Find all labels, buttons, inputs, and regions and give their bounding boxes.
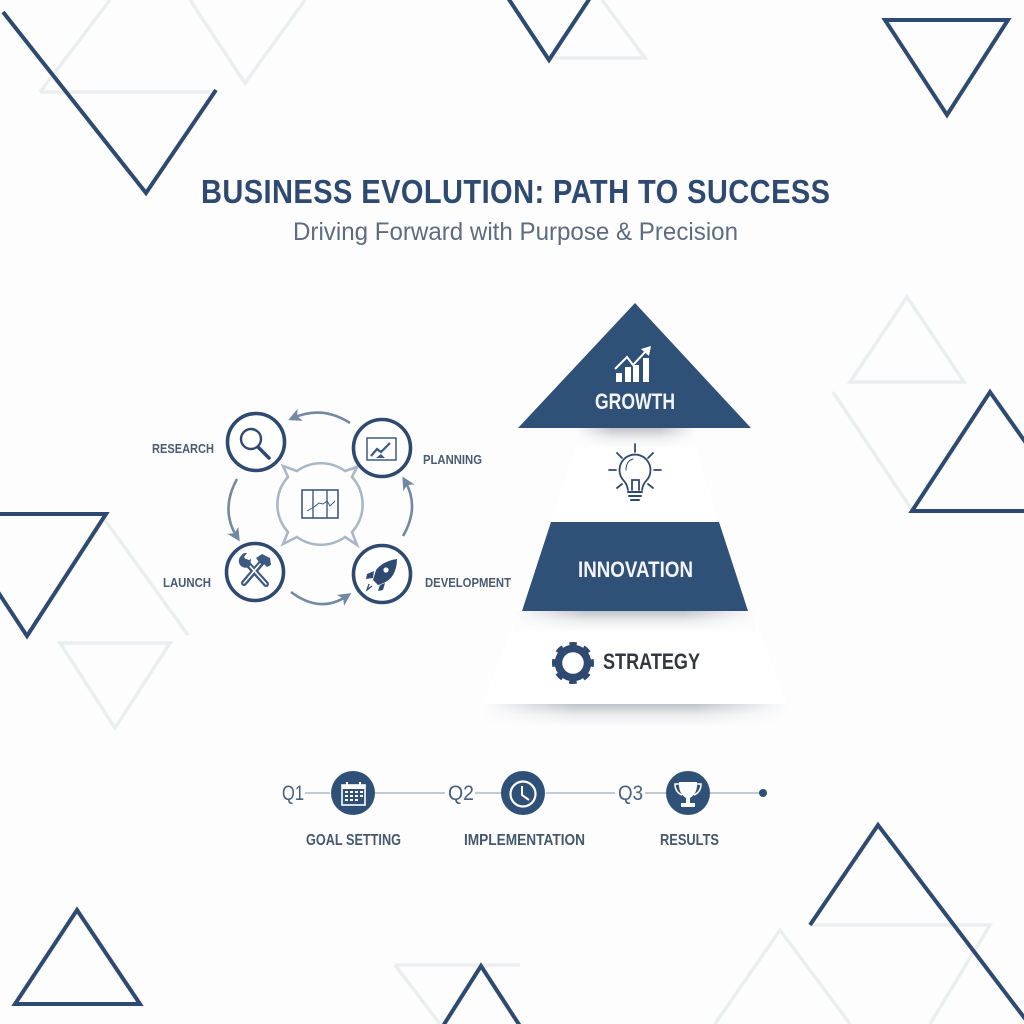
label: Q1: Q1 bbox=[282, 782, 304, 805]
icon: gear bbox=[554, 644, 592, 682]
node: launch tools bbox=[226, 544, 284, 600]
growth chart icon bbox=[615, 346, 651, 382]
label: planning: PLANNING bbox=[423, 452, 482, 467]
central chart icon bbox=[302, 490, 338, 518]
label: launch: LAUNCH bbox=[163, 575, 211, 590]
timeline bbox=[282, 771, 767, 849]
icon: calendar bbox=[331, 771, 375, 815]
growth label: GROWTH bbox=[595, 389, 675, 414]
node: planning bbox=[354, 420, 410, 476]
tier: growth bbox=[518, 303, 751, 428]
innovation label: INNOVATION bbox=[578, 557, 693, 582]
tier shadows bbox=[483, 428, 787, 726]
label: Q3: Q3 bbox=[618, 782, 643, 805]
label: results: RESULTS bbox=[660, 832, 719, 849]
label: development: DEVELOPMENT bbox=[425, 575, 511, 590]
strategy label: STRATEGY bbox=[603, 649, 700, 674]
label: goal setting: GOAL SETTING bbox=[306, 832, 401, 849]
label: Q2: Q2 bbox=[448, 782, 474, 805]
node: research bbox=[228, 414, 284, 470]
pale tier backgrounds bbox=[483, 428, 787, 704]
icon: trophy bbox=[666, 771, 710, 815]
title: BUSINESS EVOLUTION: PATH TO SUCCESS bbox=[201, 173, 830, 210]
tier: strategy bbox=[554, 644, 700, 682]
end dot bbox=[759, 789, 767, 797]
cycle arrows bbox=[228, 413, 412, 604]
pyramid bbox=[483, 303, 787, 726]
subtitle: Driving Forward with Purpose & Precision bbox=[293, 218, 738, 246]
label: implementation: IMPLEMENTATION bbox=[464, 832, 585, 849]
icon: light bulb bbox=[609, 444, 661, 500]
central hub shape bbox=[277, 463, 363, 545]
label: research: RESEARCH bbox=[152, 441, 214, 456]
icon: clock bbox=[501, 771, 545, 815]
tier: innovation bbox=[522, 522, 748, 611]
process cycle diagram bbox=[152, 413, 511, 604]
node: development rocket bbox=[354, 546, 410, 602]
